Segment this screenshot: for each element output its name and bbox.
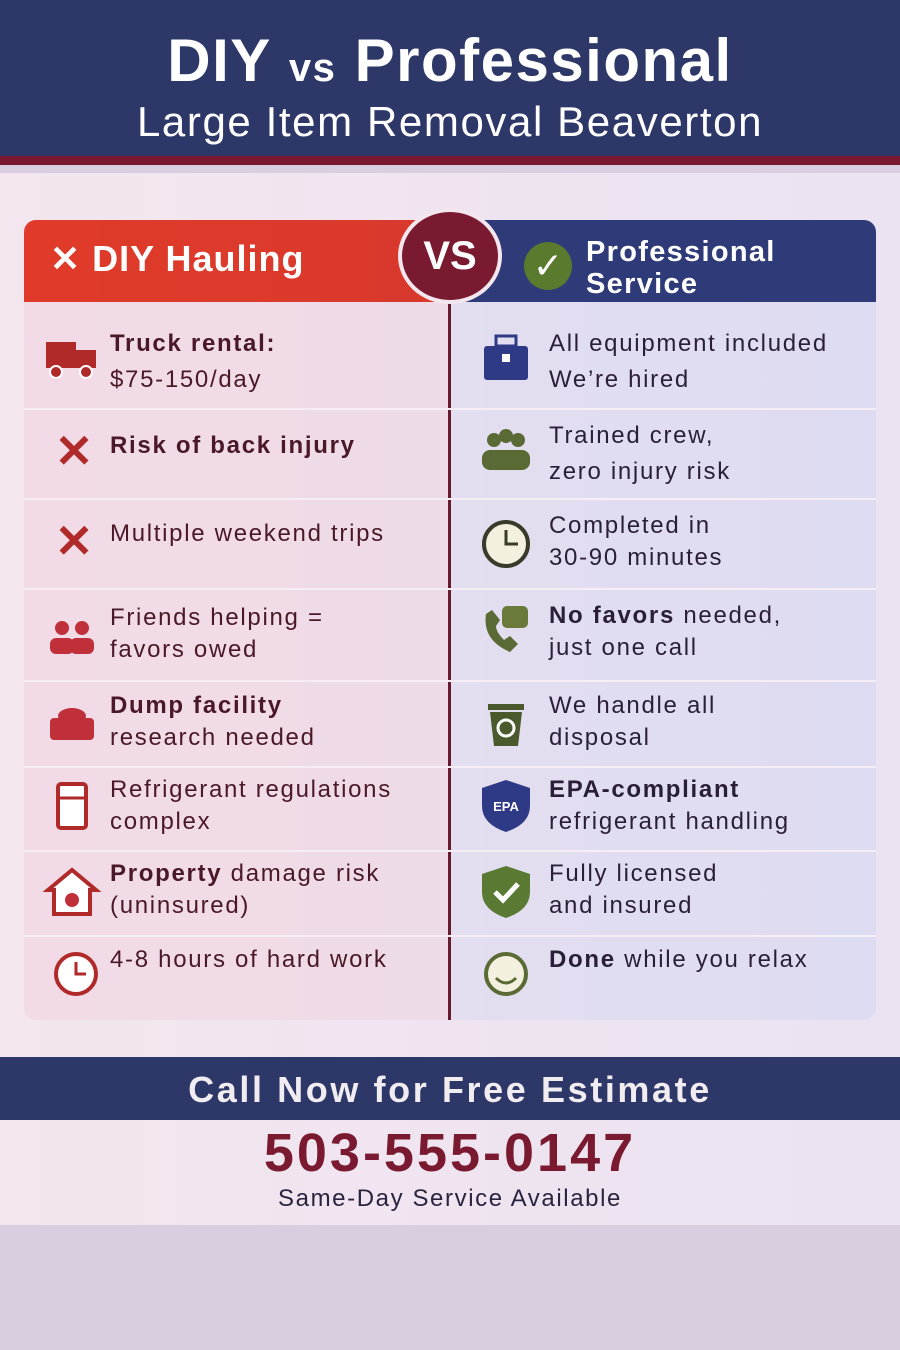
CTA banner: Call Now for Free Estimate xyxy=(188,1069,712,1110)
text: completed: Completed in xyxy=(549,512,711,539)
header: Professional xyxy=(450,220,876,302)
text: back injury: Risk of back injury xyxy=(110,432,356,459)
text: crew xyxy=(549,422,731,485)
text: licensed: Fully licensed xyxy=(549,860,718,887)
header xyxy=(0,0,900,165)
text: hours: 4-8 hours of hard work xyxy=(110,946,388,973)
icon: shield check xyxy=(482,866,530,918)
text: licensed xyxy=(549,860,718,919)
text: disposal: We handle all xyxy=(549,692,716,719)
text: completed xyxy=(549,512,723,571)
text: truck rental: Truck rental: xyxy=(110,330,276,357)
text: refrigerant xyxy=(110,776,392,835)
text: equipment: All equipment included xyxy=(549,330,828,357)
text: friends: Friends helping = xyxy=(110,604,324,631)
icon: phone xyxy=(486,606,528,652)
availability note: Same-Day Service Available xyxy=(278,1185,622,1212)
right column items xyxy=(482,330,828,996)
text: equipment: We’re hired xyxy=(549,366,690,393)
icon: x: ✕ xyxy=(55,515,93,567)
header: DIY xyxy=(24,220,450,302)
text: relax: Done while you relax xyxy=(549,946,808,973)
text: favors: No favors needed, xyxy=(549,602,782,629)
text: friends xyxy=(110,604,324,663)
subtitle: Large Item Removal Beaverton xyxy=(137,98,763,145)
text: disposal xyxy=(549,692,716,751)
icon: toolbox xyxy=(484,334,528,380)
text: property: Property damage risk xyxy=(110,860,380,887)
icon: fridge xyxy=(56,782,88,830)
text: weekend trips: Multiple weekend trips xyxy=(110,520,385,547)
text: truck rental: $75-150/day xyxy=(110,366,262,393)
icon: dump xyxy=(50,708,94,740)
text: crew: zero injury risk xyxy=(549,458,731,485)
phone number: 503-555-0147 xyxy=(264,1123,636,1183)
header: Professional: Service xyxy=(586,268,698,300)
icon: EPA shield xyxy=(482,780,530,832)
text: dump: research needed xyxy=(110,724,316,751)
divider xyxy=(448,302,451,1020)
comparison table xyxy=(24,220,876,1020)
text: favors: just one call xyxy=(549,634,698,661)
icon: house xyxy=(42,868,102,916)
text: EPA: EPA-compliant xyxy=(549,776,740,803)
text: property: (uninsured) xyxy=(110,892,250,919)
text: refrigerant: Refrigerant regulations xyxy=(110,776,392,803)
header: DIY: ✕ DIY Hauling xyxy=(50,238,305,279)
text: completed: 30-90 minutes xyxy=(549,544,723,571)
icon: bin xyxy=(488,704,524,746)
icon: truck xyxy=(46,342,96,379)
left column items xyxy=(42,330,392,996)
icon: EPA shield: EPA xyxy=(493,799,519,814)
icon: x: ✕ xyxy=(55,425,93,477)
text: EPA: refrigerant handling xyxy=(549,808,790,835)
icon: friends xyxy=(50,621,94,654)
text: truck rental xyxy=(110,330,276,393)
text: EPA xyxy=(549,776,790,835)
title: DIY vs Professional xyxy=(167,27,733,94)
VS badge xyxy=(398,208,502,304)
text: disposal: disposal xyxy=(549,724,651,751)
header: Professional: Professional xyxy=(586,236,776,268)
text: favors xyxy=(548,602,782,661)
background xyxy=(0,173,900,1225)
text: equipment xyxy=(549,330,828,393)
text: property xyxy=(110,860,380,919)
icon: crew xyxy=(482,429,530,470)
text: crew: Trained crew, xyxy=(549,422,714,449)
text: friends: favors owed xyxy=(110,636,258,663)
text: dump xyxy=(110,692,316,751)
icon: smile xyxy=(484,952,528,996)
CTA banner xyxy=(0,1057,900,1120)
text: dump: Dump facility xyxy=(110,692,283,719)
icon: clock xyxy=(482,520,530,568)
text: refrigerant: complex xyxy=(110,808,211,835)
VS badge: VS xyxy=(423,234,477,278)
icon: clock xyxy=(54,952,98,996)
header: Professional: ✓ xyxy=(533,245,563,286)
text: licensed: and insured xyxy=(549,892,693,919)
